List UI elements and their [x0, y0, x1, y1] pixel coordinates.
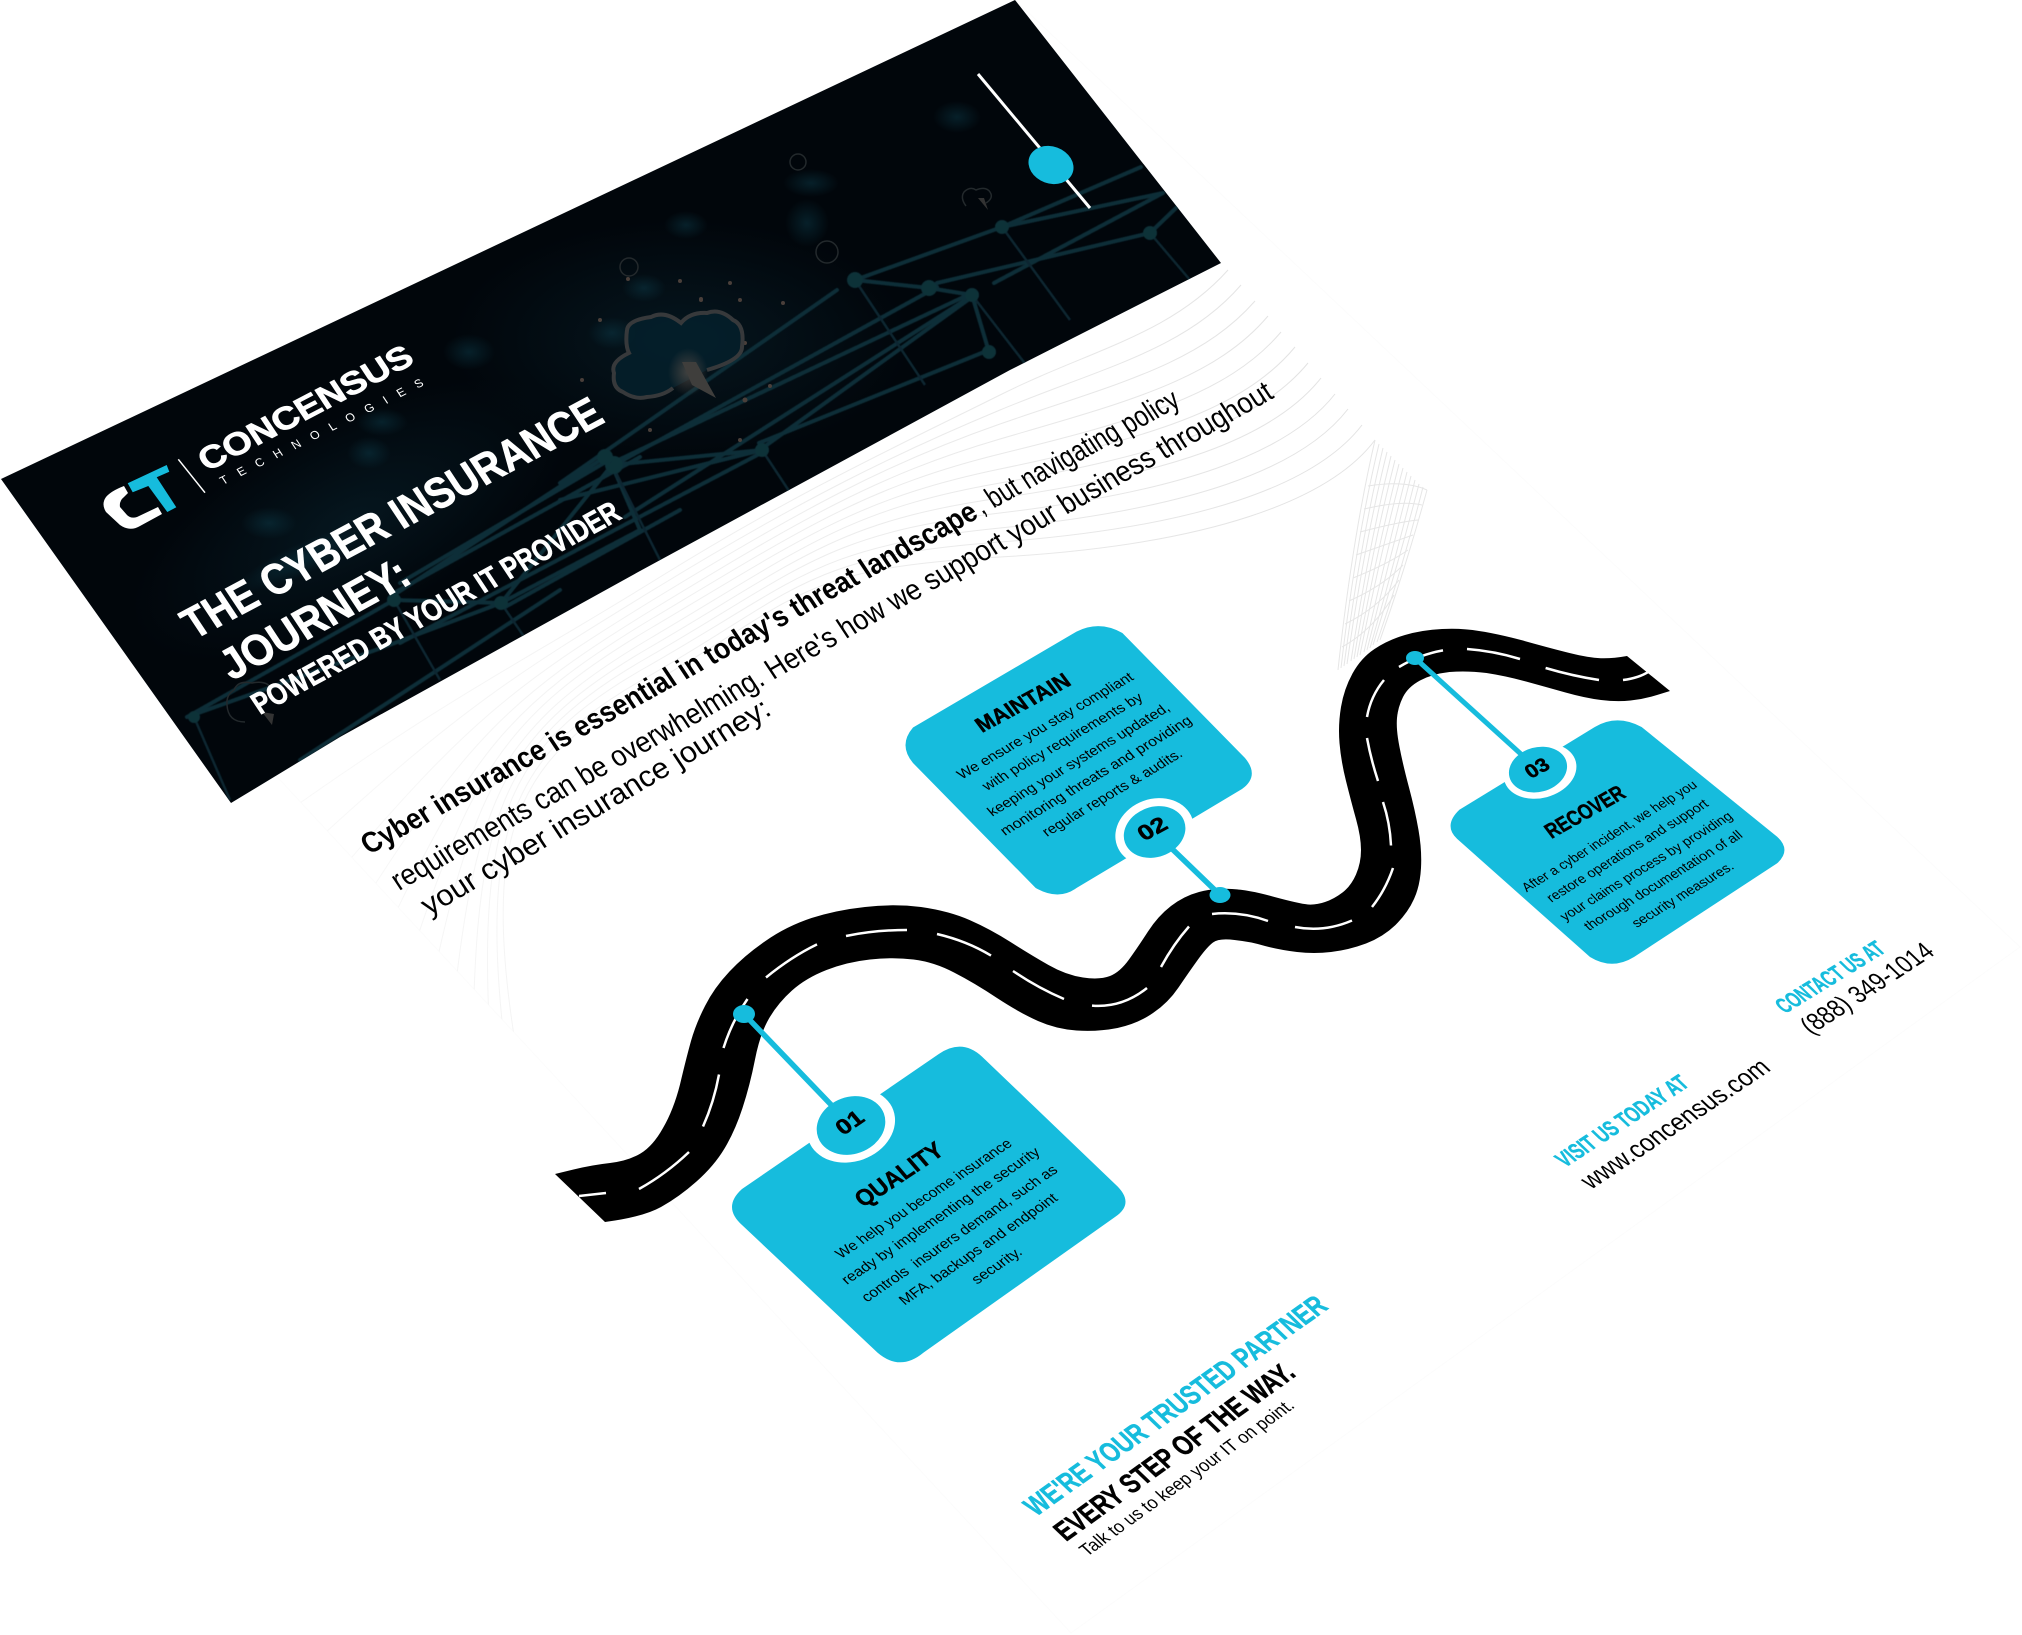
number badge 01 [808, 1087, 894, 1164]
banner background [1, 0, 1221, 803]
number badge 01: 01 [830, 1105, 869, 1140]
card 03 [1451, 720, 1784, 964]
body text 03: thorough documentation of all [1580, 827, 1746, 933]
title: THE CYBER INSURANCE [171, 387, 612, 648]
connector line 03 [1415, 658, 1538, 770]
logo divider [178, 459, 205, 493]
body text 02 [954, 670, 1196, 840]
body text 03 [1518, 777, 1746, 933]
body text 02: regular reports & audits. [1039, 746, 1186, 840]
contact: phone: (888) 349-1014 [1794, 937, 1940, 1039]
card 01 [732, 1047, 1126, 1362]
number badge 02 [1116, 798, 1193, 866]
body text 03: security measures. [1628, 858, 1737, 930]
road marker dot 01 [733, 1005, 755, 1023]
white rule with cyan dot [978, 74, 1090, 208]
body text 01: controls insurers demand, such as [858, 1162, 1061, 1305]
body text 02: keeping your systems updated, [985, 701, 1174, 820]
panel: dark header banner [1, 0, 1221, 803]
badge ring 03 [1497, 735, 1583, 807]
body text 01: security. [968, 1244, 1026, 1288]
body text 03: After a cyber incident, we help you [1518, 777, 1700, 895]
heading quality: QUALITY [849, 1137, 949, 1213]
road surface [555, 629, 1670, 1222]
road marker dot 03 [1406, 651, 1424, 665]
body text 03: restore operations and support [1543, 796, 1712, 905]
logo [104, 338, 426, 529]
number badge 02: 02 [1132, 812, 1172, 845]
heading maintain: MAINTAIN [970, 668, 1075, 737]
banner glow and network image [91, 101, 1190, 800]
logo mark C [104, 486, 162, 529]
body text 03: your claims process by providing [1556, 808, 1736, 924]
title [171, 387, 612, 689]
title: JOURNEY: [209, 548, 419, 689]
connector line 01 [744, 1014, 851, 1126]
intro text: your cyber insurance journey: [415, 692, 777, 922]
body text 02: We ensure you stay compliant [954, 670, 1137, 783]
badge ring 02 [1106, 787, 1203, 877]
decorative cloud icon [613, 312, 743, 398]
subtitle: POWERED BY YOUR IT PROVIDER [245, 495, 627, 721]
logo mark T [128, 465, 176, 512]
road centre dashes [579, 649, 1649, 1196]
intro text: , but navigating policy [968, 383, 1186, 521]
road marker dot 02 [1210, 887, 1230, 903]
panel: step 01 quality [732, 1005, 1126, 1362]
logo tagline: TECHNOLOGIES [217, 376, 426, 487]
body text 01: We help you become insurance [832, 1136, 1016, 1262]
body text 01: MFA, backups and endpoint [895, 1190, 1062, 1308]
body text 02: monitoring threats and providing [997, 713, 1196, 839]
body text 01: ready by implementing the security [838, 1144, 1044, 1288]
closing message: EVERY STEP OF THE WAY. [1047, 1357, 1302, 1547]
contact: phone: CONTACT US AT [1770, 937, 1892, 1018]
contact: website: www.concensus.com [1573, 1053, 1776, 1195]
panel: step 03 recover [1406, 651, 1784, 964]
background wave lines [393, 270, 1374, 1031]
card 02 [906, 626, 1252, 894]
closing message: WE'RE YOUR TRUSTED PARTNER [1017, 1290, 1335, 1522]
badge ring 01 [796, 1076, 906, 1175]
road [555, 629, 1670, 1222]
number badge 03: 03 [1521, 754, 1554, 783]
background mesh [1338, 440, 1427, 670]
intro text: requirements can be overwhelming. Here's how we support your business throughout [385, 375, 1280, 897]
number badge 03 [1504, 740, 1572, 799]
intro text: Cyber insurance is essential in today's threat landscape [355, 496, 984, 861]
logo wordmark: CONCENSUS [190, 338, 420, 478]
contact: website: VISIT US TODAY AT [1550, 1071, 1695, 1172]
connector line 02 [1155, 832, 1220, 895]
body text 02: with policy requirements by [978, 690, 1147, 795]
small cloud icons [227, 154, 991, 725]
closing message: Talk to us to keep your IT on point. [1075, 1396, 1299, 1560]
contact: phone [1770, 937, 1940, 1039]
heading recover: RECOVER [1540, 781, 1630, 843]
panel: step 02 maintain [906, 626, 1252, 903]
